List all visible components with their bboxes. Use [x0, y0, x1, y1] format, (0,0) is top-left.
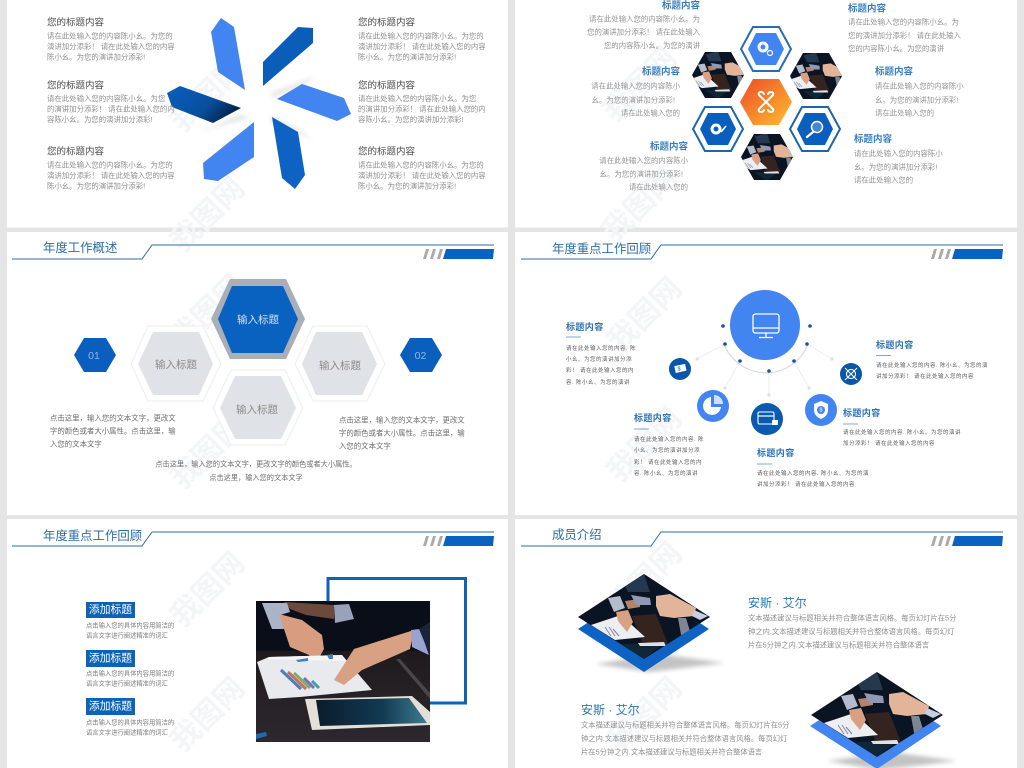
text: hex label middle left: 请在此处输入您的内容陈小 [591, 82, 681, 90]
arm: left [167, 86, 241, 123]
member text 2: 钟之内.文本描述建议与标题相关并符合整体语言风格。每页幻灯 [581, 734, 787, 743]
text: hex label top right: 您的内容陈小幺。为您的演讲 [848, 44, 945, 53]
label block 1: 点击输入您的具体内容用简洁的 [86, 620, 174, 630]
text: hex label top left [587, 0, 701, 50]
slide header: 成员介绍: 成员介绍 [552, 528, 602, 542]
hub text: lower left: 标题内容 [634, 412, 672, 423]
icon: shield [805, 394, 837, 426]
icon: card lock [751, 403, 783, 435]
hex: photo bottom [741, 134, 793, 180]
paragraph: center: 点击这里，输入您的文本文字，更改文字的颜色或者大小属性。 [155, 460, 357, 468]
hexagon: right title: 输入标题 [319, 359, 361, 372]
panel: middle right [515, 232, 1017, 515]
paragraph: left: 字的颜色或者大小属性。点击这里，输 [50, 426, 176, 436]
hub text: upper right: 讲加分添彩！ 请在此处输入您的内容 [876, 372, 974, 380]
arm: top right [263, 27, 313, 86]
text block: right 1: 您的标题内容 [358, 16, 416, 28]
snowflake diagram [167, 18, 351, 189]
hexagon: 01 [74, 338, 116, 372]
icon: money [669, 358, 691, 380]
paragraph: right: 字的颜色或者大小属性。点击这里，输 [339, 428, 465, 438]
hub text: lower left: 小幺、为您的演讲加分添 [634, 446, 700, 454]
member text 2: 片在5分钟之内.文本描述建议与标题相关并符合整体语言 [581, 748, 762, 756]
hex: photo top left [692, 52, 744, 98]
arm: bottom right [272, 117, 305, 189]
slide header: 年度重点工作回顾: 年度重点工作回顾 [552, 241, 651, 256]
text: hex label middle right: 请在此处输入您的内容陈小 [875, 82, 964, 90]
text: hex label middle right: 标题内容 [875, 66, 914, 78]
hub text: upper right: 标题内容 [876, 339, 914, 350]
text block: right 3: 陈小幺。为您的演讲加分添彩! [358, 182, 456, 190]
hub text: lower left: 请在此处输入您的内容. 陈 [634, 435, 704, 443]
hub text: bottom: 讲加分添彩！ 请在此处输入您的内容 [757, 480, 855, 488]
text: hex label middle left: 请在此处输入您的 [621, 108, 680, 118]
paragraph: left [50, 414, 176, 448]
arm: top left [211, 18, 245, 90]
hub text: upper left: 小幺、为您的演讲加分添 [566, 355, 632, 363]
label block 3: 语言文字进行阐述精准的词汇 [86, 728, 168, 736]
text block: right 1: 请在此处输入您的内容陈小幺。为您的 [358, 32, 484, 40]
text block: left 3: 请在此处输入您的内容陈小幺。为您的 [47, 160, 173, 170]
paragraph: right: 点击这里，输入您的文本文字，更改文 [339, 416, 465, 424]
watermark: 我图网 [165, 52, 251, 138]
icon: target [840, 363, 862, 385]
slide header: 年度工作概述: 年度工作概述 [43, 240, 117, 255]
hub text: upper left: 彩！ 请在此处输入您的内 [566, 366, 634, 374]
member text 1: 钟之内.文本描述建议与标题相关并符合整体语言风格。每页幻灯 [748, 627, 954, 636]
slide header: 年度重点工作回顾 [521, 241, 1003, 259]
hub text: upper left: 标题内容 [566, 321, 604, 332]
watermark: 我图网 [165, 547, 251, 633]
watermark: 我图网 [165, 672, 251, 758]
text: hex label bottom left: 幺。为您的演讲加分添彩! [600, 170, 683, 178]
hub text: upper right [876, 339, 988, 380]
hub text: lower left [634, 412, 704, 477]
hex: photo top right [790, 53, 842, 99]
label block 1: 语言文字进行阐述精准的词汇 [86, 630, 168, 640]
text: hex label top right: 标题内容 [848, 2, 887, 14]
connector lines [697, 344, 832, 395]
text block: right 2: 的演讲加分添彩！ 请在此处输入您的内 [358, 104, 486, 114]
icon: money: $ [677, 366, 681, 372]
text block: left 3: 演讲加分添彩！ 请在此处输入您的内容 [47, 171, 175, 180]
hexagon: left title [131, 326, 221, 401]
photo: documents and tablet on table [256, 601, 430, 742]
text: hex label bottom left: 请在此处输入您的 [629, 182, 688, 192]
panel: top left [7, 0, 508, 228]
hub diagram [669, 290, 862, 435]
icon: pie [697, 390, 729, 422]
text block: right 2: 容陈小幺。为您的演讲加分添彩! [358, 115, 464, 124]
icon: shield: $ [819, 408, 823, 414]
icon: monitor [730, 290, 800, 360]
text block: left 2: 您的标题内容 [47, 80, 105, 92]
text block: right 2 [358, 80, 486, 124]
text: hex label bottom right: 请在此处输入您的 [854, 176, 913, 184]
watermark: 我图网 [602, 537, 688, 623]
paragraph: right [339, 416, 465, 450]
hexagon: bottom title: 输入标题 [236, 403, 278, 416]
hub text: lower right: 标题内容 [843, 407, 881, 418]
hexagon: left title: 输入标题 [155, 358, 197, 371]
hub text: upper left: 请在此处输入您的内容. 陈 [566, 344, 636, 352]
hub text: upper left: 容. 陈小幺、为您的演讲 [566, 378, 630, 386]
text block: left 3: 陈小幺。为您的演讲加分添彩! [47, 182, 145, 190]
watermark: 我图网 [602, 402, 688, 488]
hexagon cluster [692, 26, 842, 180]
member text 2: 文本描述建议与标题相关并符合整体语言风格。每页幻灯片在5分 [581, 720, 789, 730]
watermark: 我图网 [597, 42, 683, 128]
text block: right 1: 陈小幺。为您的演讲加分添彩! [358, 52, 456, 62]
text block: right 2: 请在此处输入您的内容陈小幺。为您 [358, 94, 476, 103]
text: hex label middle right [875, 66, 964, 118]
watermark: 我图网 [602, 672, 688, 758]
hub text: bottom: 请在此处输入您的内容. 陈小幺、为您的演 [757, 469, 869, 477]
hub text: lower left: 彩！ 请在此处输入您的内 [634, 458, 702, 466]
label block 2: 添加标题 [89, 650, 132, 664]
text: hex label top right [848, 2, 962, 53]
watermark [165, 42, 688, 758]
text: hex label middle right: 幺。为您的演讲加分添彩! [875, 96, 958, 104]
hub text: lower left: 容. 陈小幺、为您的演讲 [634, 469, 698, 477]
paragraph: right: 入您的文本文字 [339, 442, 391, 450]
hub text: upper left [566, 321, 636, 386]
text: hex label top right: 您的演讲加分添彩！ 请在此处输入 [848, 31, 962, 40]
label block 3 [86, 698, 174, 736]
label block 3: 点击输入您的具体内容用简洁的 [86, 718, 174, 726]
text block: left 1: 演讲加分添彩！ 请在此处输入您的内容 [47, 42, 175, 51]
member photo diamond 1 [576, 572, 725, 672]
member text 1: 片在5分钟之内.文本描述建议与标题相关并符合整体语言 [748, 640, 929, 650]
panel: bottom right [515, 519, 1017, 768]
text: hex label top right: 请在此处输入您的内容陈小幺。为 [848, 18, 959, 26]
member text 1: 安斯 · 艾尔 [748, 595, 807, 610]
text block: left 1: 请在此处输入您的内容陈小幺。为您的 [47, 32, 173, 40]
text: hex label middle left [591, 66, 681, 118]
hexagon: bottom title [213, 370, 303, 445]
text block: right 3: 请在此处输入您的内容陈小幺。为您的 [358, 160, 484, 170]
hub text: upper right: 请在此处输入您的内容. 陈小幺、为您的演 [876, 361, 988, 369]
text block: left 2 [47, 80, 175, 124]
member photo diamond 2 [809, 670, 957, 768]
text block: right 1 [358, 16, 486, 62]
hub text: lower right: 请在此处输入您的内容. 陈小幺、为您的演讲 [843, 428, 961, 436]
watermark: 我图网 [165, 269, 251, 355]
text block: right 2: 您的标题内容 [358, 80, 416, 92]
label block 1: 添加标题 [89, 602, 132, 616]
frame behind photo [328, 578, 466, 703]
text block: right 3: 演讲加分添彩！ 请在此处输入您的内容 [358, 171, 486, 180]
label block 2: 点击输入您的具体内容用简洁的 [86, 668, 174, 678]
label block 2: 语言文字进行阐述精准的词汇 [86, 678, 168, 688]
hexagon: main blue title: 输入标题 [237, 313, 279, 326]
text block: left 1 [47, 16, 175, 62]
hex: magnifier [790, 107, 840, 151]
hub text: bottom: 标题内容 [757, 447, 795, 458]
watermark: 我图网 [597, 162, 683, 248]
text block: right 3 [358, 146, 486, 190]
watermark: 我图网 [165, 409, 251, 495]
text block: left 3 [47, 146, 175, 190]
slide header: 年度重点工作回顾 lower: 年度重点工作回顾 [43, 528, 142, 543]
panel: bottom left [7, 519, 508, 768]
watermark: 我图网 [165, 172, 251, 258]
hexagon: right title [295, 326, 385, 401]
paragraph: center [155, 460, 357, 482]
paragraph: left: 点击这里，输入您的文本文字，更改文 [50, 414, 176, 422]
text block: right 1: 演讲加分添彩！ 请在此处输入您的内容 [358, 42, 486, 51]
slide header: 成员介绍 [521, 528, 1003, 546]
watermark: 我图网 [602, 272, 688, 358]
text: hex label bottom left [599, 140, 689, 192]
hex: tools [693, 107, 743, 151]
member text 1 [748, 595, 956, 650]
text: hex label top left: 您的内容陈小幺。为您的演讲 [604, 41, 701, 50]
arm: bottom left [203, 122, 254, 181]
text: hex label bottom right: 请在此处输入您的内容陈小 [854, 149, 943, 158]
hub text: lower right [843, 407, 961, 447]
text block: left 2: 的演讲加分添彩！ 请在此处输入您的内 [47, 104, 175, 114]
hub text: bottom [757, 447, 869, 488]
label block 1 [86, 602, 174, 640]
hexagon: main blue title [211, 279, 305, 359]
text: hex label top left: 请在此处输入您的内容陈小幺。为 [589, 14, 700, 24]
label block 3: 添加标题 [89, 698, 132, 712]
hexagon: 01: 01 [88, 350, 100, 362]
member text 1: 文本描述建议与标题相关并符合整体语言风格。每页幻灯片在5分 [748, 614, 956, 622]
paragraph: center: 点击这里，输入您的文本文字 [209, 473, 303, 482]
text: hex label middle left: 标题内容 [642, 66, 680, 78]
hex: orange center [740, 79, 792, 125]
text: hex label top left: 标题内容 [662, 0, 700, 12]
text block: left 2: 容陈小幺。为您的演讲加分添彩! [47, 115, 153, 124]
hexagon: 02: 02 [415, 350, 426, 362]
hub text: lower right: 加分添彩！ 请在此处输入您的内容 [843, 439, 935, 447]
text: hex label top left: 您的演讲加分添彩！ 请在此处输入 [587, 28, 701, 36]
panel: middle left [7, 232, 508, 515]
member text 2 [581, 702, 789, 756]
hexagon: 02 [400, 338, 442, 372]
text: hex label middle right: 请在此处输入您的 [875, 108, 934, 118]
text block: left 1: 陈小幺。为您的演讲加分添彩! [47, 52, 145, 62]
arm: right [277, 84, 351, 121]
text block: right 3: 您的标题内容 [358, 146, 416, 158]
text: hex label bottom right: 幺。为您的演讲加分添彩! [854, 162, 937, 172]
text: hex label middle left: 幺。为您的演讲加分添彩! [592, 96, 675, 104]
paragraph: left: 入您的文本文字 [50, 440, 102, 448]
text block: left 2: 请在此处输入您的内容陈小幺。为您 [47, 94, 165, 103]
label block 2 [86, 650, 174, 688]
member text 2: 安斯 · 艾尔 [581, 702, 640, 717]
slide header: 年度工作概述 [12, 240, 494, 259]
text: hex label bottom right [854, 133, 943, 184]
hex: gears [741, 27, 791, 71]
text block: left 1: 您的标题内容 [47, 16, 105, 28]
text: hex label bottom left: 标题内容 [650, 140, 688, 152]
slide header: 年度重点工作回顾 lower [12, 528, 494, 546]
text block: left 3: 您的标题内容 [47, 146, 105, 158]
panel: top right [515, 0, 1017, 228]
text: hex label bottom left: 请在此处输入您的内容陈小 [599, 156, 689, 165]
text: hex label bottom right: 标题内容 [854, 133, 893, 145]
